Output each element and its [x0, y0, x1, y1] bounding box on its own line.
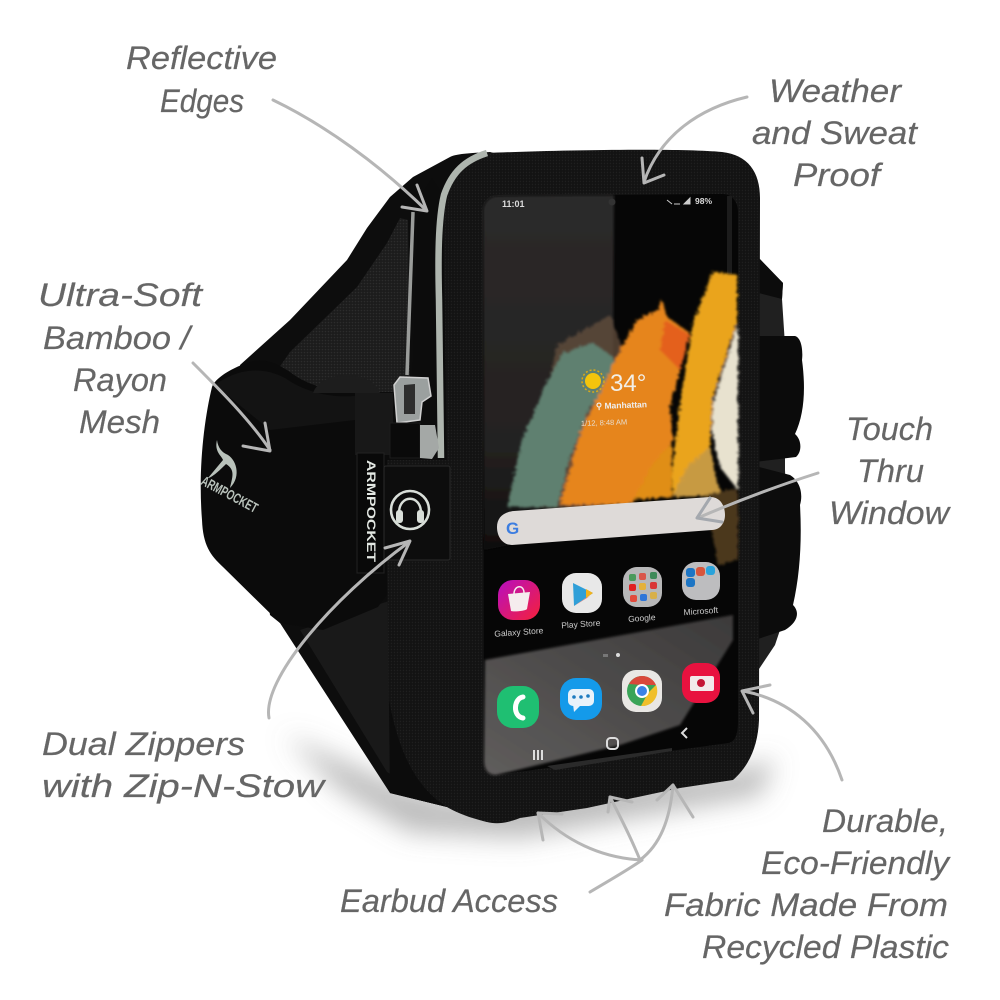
google folder	[623, 567, 662, 607]
arrow: weather and sweat proof	[642, 97, 747, 183]
front frame	[387, 150, 760, 823]
bottom bar	[547, 748, 672, 770]
label: earbud access: Earbud Access	[340, 883, 558, 919]
label: ultra-soft mesh: Mesh	[79, 404, 160, 440]
lower screen reflection	[484, 615, 733, 775]
logo wordmark: ARMPOCKET	[199, 473, 261, 516]
buckle	[313, 375, 380, 393]
label: durable fabric: Eco-Friendly	[761, 845, 951, 881]
wallpaper	[507, 272, 738, 565]
label: ultra-soft mesh: Rayon	[73, 362, 167, 398]
play store	[562, 573, 602, 613]
status bar	[502, 196, 712, 209]
label: ultra-soft mesh	[38, 277, 203, 440]
app labels: Microsoft	[683, 605, 719, 617]
status bar: 98%	[695, 196, 712, 206]
arrow: touch window	[697, 473, 818, 522]
screen background	[483, 194, 738, 775]
thin reflective strip	[407, 212, 413, 375]
galaxy store	[498, 580, 540, 620]
microsoft folder	[682, 562, 720, 600]
label: dual zippers	[42, 726, 326, 804]
phone screen	[483, 194, 738, 775]
app labels: Galaxy Store	[494, 625, 544, 639]
side panel fabric	[262, 218, 410, 392]
weather widget: 34°	[610, 370, 646, 397]
status bar: 11:01	[502, 199, 525, 209]
label: dual zippers: with Zip-N-Stow	[42, 768, 326, 804]
label: weather and sweat proof	[752, 73, 918, 193]
right glass glare	[727, 196, 732, 274]
weather widget: 1/12, 8:48 AM	[581, 417, 627, 428]
search bar: G	[506, 519, 519, 538]
zipper channel	[412, 178, 446, 390]
messages app	[560, 678, 602, 720]
headphone jack patch	[384, 466, 450, 560]
arrow: dual zippers	[269, 541, 410, 718]
left glass reflection	[483, 195, 614, 550]
label: ultra-soft mesh: Bamboo /	[43, 320, 193, 356]
armband cuff	[201, 360, 390, 630]
arrow: earbud access	[538, 785, 693, 892]
app icons	[494, 562, 720, 728]
armband product	[199, 150, 804, 823]
app labels	[494, 605, 719, 639]
tag with wordmark: ARMPOCKET	[364, 460, 378, 563]
arrow: durable fabric	[742, 685, 842, 780]
label: reflective edges: Edges	[160, 83, 244, 119]
label: durable fabric: Recycled Plastic	[702, 929, 949, 965]
cuff strap above tag	[355, 393, 393, 455]
app labels: Google	[628, 612, 656, 624]
chrome app	[622, 670, 662, 712]
bottom shade	[389, 700, 447, 807]
tag with wordmark	[357, 453, 384, 573]
label: durable fabric: Fabric Made From	[664, 887, 948, 923]
weather widget	[581, 370, 647, 428]
label: weather and sweat proof: Weather	[769, 73, 902, 109]
camera app	[682, 663, 720, 703]
label: reflective edges: Reflective	[126, 40, 277, 76]
label: touch thru window: Touch	[846, 411, 933, 447]
label: durable fabric	[664, 803, 951, 965]
label: dual zippers: Dual Zippers	[42, 726, 245, 762]
navigation bar	[534, 728, 687, 760]
label: reflective edges	[126, 40, 277, 119]
search bar	[497, 497, 725, 545]
zipper pulls	[390, 377, 439, 459]
lower side fabric	[300, 600, 392, 775]
drop shadow under armband	[285, 735, 775, 838]
arrow: bamboo mesh	[193, 363, 270, 451]
label: touch thru window	[829, 411, 951, 531]
weather widget: ⚲ Manhattan	[596, 399, 647, 411]
label: weather and sweat proof: and Sweat	[752, 115, 918, 151]
label: weather and sweat proof: Proof	[793, 157, 884, 193]
logo mark	[199, 440, 261, 516]
app labels: Play Store	[561, 618, 601, 630]
arrow: reflective edges	[273, 100, 427, 211]
page dots	[603, 653, 620, 657]
reflective edge	[439, 153, 487, 458]
label: touch thru window: Thru	[857, 453, 924, 489]
label: ultra-soft mesh: Ultra-Soft	[38, 277, 203, 313]
armband back body and binding	[240, 152, 520, 822]
cuff top fold	[215, 371, 355, 430]
phone app	[497, 686, 539, 728]
label: durable fabric: Durable,	[822, 803, 948, 839]
label: touch thru window: Window	[829, 495, 951, 531]
right side straps	[755, 254, 804, 675]
